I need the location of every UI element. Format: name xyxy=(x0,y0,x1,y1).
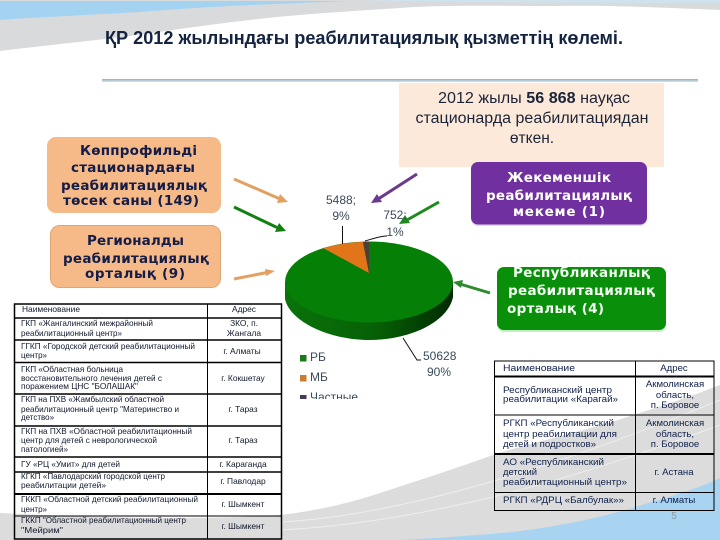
arrow: republican to pie xyxy=(453,280,490,293)
row 3: детский xyxy=(503,467,537,478)
row 2: Акмолинская xyxy=(646,418,704,429)
pie label: 50628: 50628 xyxy=(423,349,457,363)
row 4: ГКП на ПХВ «Жамбылский областной xyxy=(21,394,164,404)
table grid xyxy=(494,361,714,510)
row 7: КГКП «Павлодарский городской центр xyxy=(21,471,165,481)
pie label: 752: 752; xyxy=(383,208,407,222)
row 8: центр» xyxy=(21,504,47,514)
pie label: 5488: 5488; xyxy=(326,193,356,207)
row 4 xyxy=(503,495,695,506)
row 8: г. Шымкент xyxy=(221,499,265,509)
row 2: п. Боровое xyxy=(651,439,699,450)
row 2: детей и подростков» xyxy=(503,439,596,450)
header row: Адрес xyxy=(232,304,256,314)
row 1: ГКП «Жангалинский межрайонный xyxy=(21,318,153,328)
box: republican centres: реабилитациялық xyxy=(508,283,655,299)
arrow: private to pie xyxy=(371,174,417,203)
row 3: восстановительного лечения детей с xyxy=(21,373,162,383)
row 4: г. Алматы xyxy=(653,495,695,506)
row 6: ГУ «РЦ «Умит» для детей xyxy=(21,459,120,469)
pie label: 5488: 9% xyxy=(332,209,350,223)
pie legend: РБ xyxy=(310,350,326,364)
row 2: область, xyxy=(656,429,694,440)
title: ҚР 2012 жылындағы реабилитациялық қызметтің көлемі. xyxy=(105,28,623,48)
box: private institution: Жекеменшік xyxy=(507,170,611,186)
box: multiprofile hospital beds xyxy=(47,137,221,213)
pie leader lines xyxy=(342,226,421,360)
row 8 xyxy=(21,494,265,514)
callout: patient total: өткен. xyxy=(510,130,554,147)
row 1: Республиканский центр xyxy=(503,385,612,396)
row 6: г. Караганда xyxy=(219,459,267,469)
pie legend xyxy=(300,352,358,399)
background swoosh: bottom xyxy=(0,385,720,540)
row 9: "Мейрим" xyxy=(21,525,63,535)
pie label: 752 xyxy=(383,208,407,239)
callout: patient total xyxy=(399,83,664,167)
row 1: Акмолинская xyxy=(646,379,704,390)
row 5: патологией» xyxy=(21,444,68,454)
row 1: реабилитационный центр» xyxy=(21,328,122,338)
box: republican centres: орталық (4) xyxy=(507,301,604,317)
row 3: АО «Республиканский xyxy=(503,457,604,468)
row 4: г. Тараз xyxy=(228,404,258,414)
box: multiprofile hospital beds: төсек саны (149) xyxy=(63,193,199,209)
pie label: 752: 1% xyxy=(386,225,404,239)
arrow: regional to pie xyxy=(234,269,275,279)
row 3: г. Кокшетау xyxy=(221,373,266,383)
header row: Адрес xyxy=(660,363,688,374)
header row: Наименование xyxy=(503,363,575,374)
box: republican centres xyxy=(497,265,666,332)
pie slice: MB 9% xyxy=(323,242,369,273)
header row: Наименование xyxy=(22,304,80,314)
header row xyxy=(22,304,256,314)
box: multiprofile hospital beds: стационардағы xyxy=(71,160,195,176)
box: regional centres xyxy=(50,226,220,288)
box: multiprofile hospital beds: Көппрофильді xyxy=(80,143,197,159)
box: regional centres: реабилитациялық xyxy=(63,251,209,267)
table: regional centres xyxy=(14,304,282,539)
table grid xyxy=(14,304,282,539)
row 3: ГКП «Областная больница xyxy=(21,364,123,374)
pie label: 50628 xyxy=(423,349,457,379)
callout: patient total: 2012 жылы 56 868 науқас xyxy=(438,90,630,107)
row 1: область, xyxy=(656,390,694,401)
row 2: центр» xyxy=(21,350,47,360)
pie chart xyxy=(285,242,453,340)
row 2: ГГКП «Городской детский реабилитационный xyxy=(21,341,195,351)
row 2 xyxy=(21,341,261,360)
row 2: г. Алматы xyxy=(223,346,261,356)
row 8: ГККП «Областной детский реабилитационный xyxy=(21,494,198,504)
row 1: ЗКО, п. xyxy=(230,318,258,328)
box: republican centres: Республиканлық xyxy=(513,265,650,281)
row 3: г. Астана xyxy=(654,467,694,478)
row 9: ГККП "Областной реабилитационный центр xyxy=(21,515,186,525)
row 1: Жангала xyxy=(227,328,261,338)
arrow: green to small slice xyxy=(399,202,439,224)
row 5: ГКП на ПХВ «Областной реабилитационный xyxy=(21,426,192,436)
row 3 xyxy=(503,457,694,488)
arrow: beds to pie xyxy=(234,179,288,203)
row 7: реабилитации детей» xyxy=(21,480,106,490)
row 3: поражением ЦНС "БОЛАШАК" xyxy=(21,381,138,391)
row 5: г. Тараз xyxy=(228,435,258,445)
box: regional centres: Регионалды xyxy=(87,233,184,249)
row 4: РГКП «РДРЦ «Балбулак»» xyxy=(503,495,624,506)
header row xyxy=(503,363,688,374)
pie label: 5488 xyxy=(326,193,356,223)
row 1 xyxy=(21,318,261,338)
pie label: 50628: 90% xyxy=(427,365,451,379)
pie legend: Частные xyxy=(310,390,358,404)
row 3 xyxy=(21,364,266,391)
row 1: п. Боровое xyxy=(651,400,699,411)
row 4 xyxy=(21,394,258,422)
row 5 xyxy=(21,426,258,454)
row 7: г. Павлодар xyxy=(220,476,266,486)
row 7 xyxy=(21,471,266,490)
row 3: реабилитационный центр» xyxy=(503,477,627,488)
box: multiprofile hospital beds: реабилитациялық xyxy=(61,178,207,194)
page number: 5 xyxy=(671,511,677,522)
table: republican centres xyxy=(494,361,714,510)
background swoosh: top xyxy=(0,0,720,51)
arrow: green to pie left xyxy=(234,207,286,232)
title rule xyxy=(102,79,698,82)
callout: patient total: стационарда реабилитациядан xyxy=(416,110,648,127)
box: regional centres: орталық (9) xyxy=(85,266,185,282)
row 9: г. Шымкент xyxy=(221,521,265,531)
row 6 xyxy=(21,459,267,469)
row 1: реабилитации «Карагай» xyxy=(503,394,618,405)
row 9 xyxy=(21,515,265,535)
row 4: детство» xyxy=(21,412,54,422)
box: private institution: реабилитациялық xyxy=(486,188,632,204)
pie slice: private 1% xyxy=(363,242,369,273)
row 2: центр реабилитации для xyxy=(503,429,617,440)
pie legend: МБ xyxy=(310,370,328,384)
row 1 xyxy=(503,379,704,411)
row 4: реабилитационный центр "Материнство и xyxy=(21,404,179,414)
row 5: центр для детей с неврологической xyxy=(21,435,157,445)
row 2: РГКП «Республиканский xyxy=(503,418,614,429)
box: private institution: мекеме (1) xyxy=(513,204,605,220)
row 2 xyxy=(503,418,704,450)
box: private institution xyxy=(471,162,647,226)
